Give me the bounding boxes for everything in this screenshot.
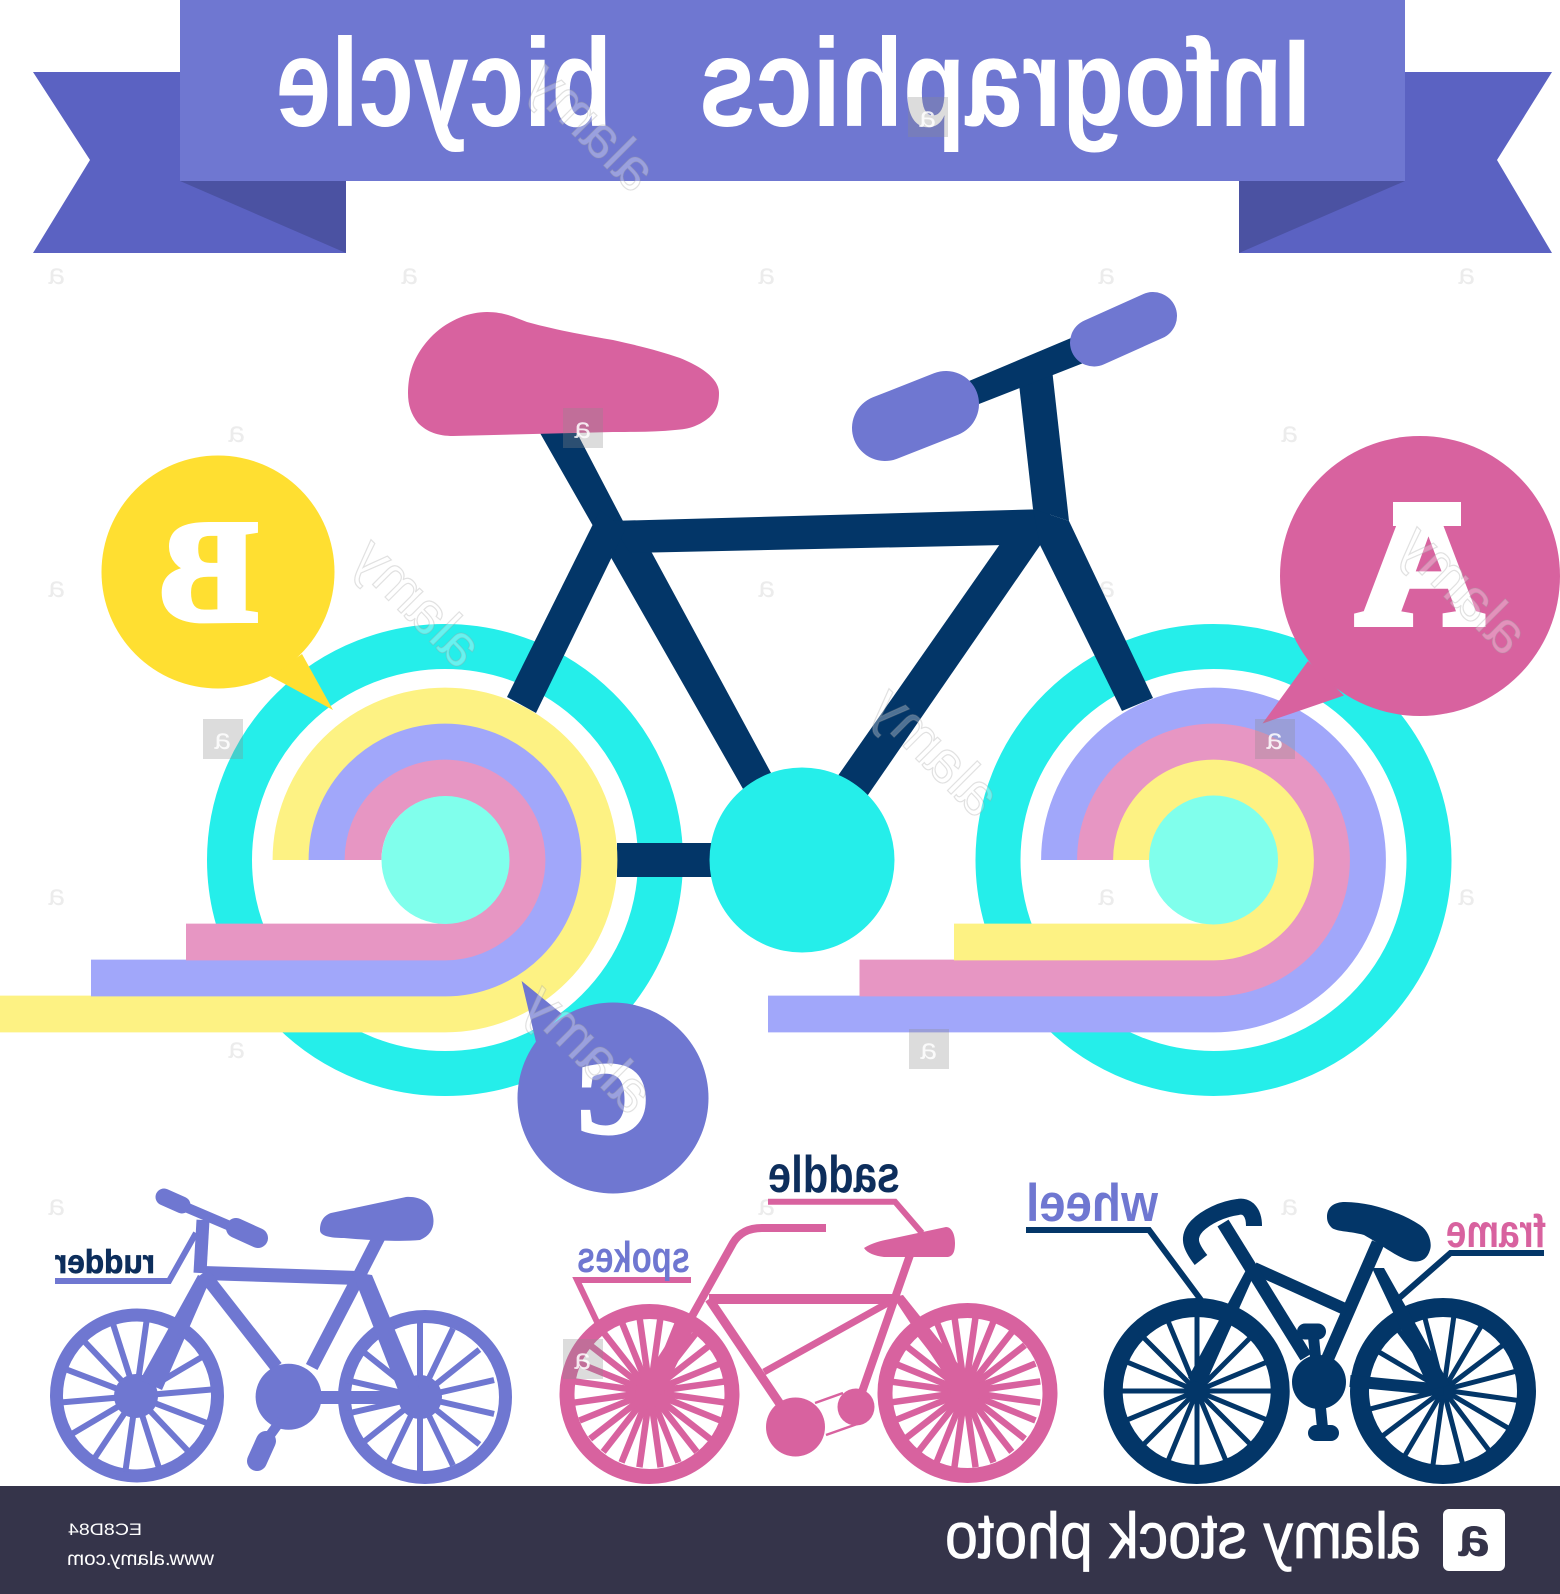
watermark: small tiles: a <box>48 1189 65 1222</box>
small bike: pink <box>567 1146 1050 1476</box>
watermark: small tiles: a <box>228 101 245 134</box>
frame <box>1223 1223 1444 1433</box>
watermark: small tiles: a <box>401 258 418 291</box>
watermark: small tiles: a <box>48 571 65 604</box>
watermark: small tiles: a <box>1098 571 1115 604</box>
frame leader line <box>1397 1253 1544 1300</box>
wheel leader line <box>1026 1230 1201 1300</box>
saddle leader line <box>768 1202 922 1233</box>
right wheel <box>885 1310 1050 1476</box>
watermark: alamy tiles: alamy <box>1386 512 1541 667</box>
watermark: small tiles: a <box>1281 1189 1298 1222</box>
label: saddle: saddle <box>768 1146 900 1204</box>
footer image id: EC8D84 <box>68 1520 142 1539</box>
pedal <box>257 1420 281 1461</box>
footer logo: a <box>1458 1505 1490 1568</box>
right wheel <box>1358 1304 1529 1476</box>
callout C: C <box>576 1043 648 1154</box>
forks <box>140 1272 420 1395</box>
ribbon right tail <box>1239 72 1552 253</box>
handlebar grip right <box>1094 316 1153 342</box>
label: wheel: wheel <box>1026 1174 1159 1233</box>
watermark: small tiles: a <box>228 416 245 449</box>
crank circle <box>710 768 894 952</box>
watermark: alamy tiles: alamy <box>514 49 669 204</box>
right wheel bands <box>768 706 1367 1014</box>
small bike: navy <box>1026 1174 1546 1476</box>
watermark: alamy tiles: alamy <box>511 971 666 1126</box>
watermark: alamy tiles: a <box>920 1033 937 1066</box>
watermark: small tiles: a <box>1458 879 1475 912</box>
left wheel bands <box>0 706 599 1014</box>
grips <box>164 1197 182 1205</box>
front-right wheel <box>344 1316 506 1478</box>
crank <box>256 1364 322 1430</box>
callout B: B <box>161 492 257 652</box>
watermark: alamy tiles: a <box>574 412 591 445</box>
crank <box>1292 1355 1346 1409</box>
crank <box>766 1398 825 1456</box>
callout A <box>1262 436 1560 724</box>
footer brand: alamy stock photo <box>945 1499 1421 1572</box>
small bike: periwinkle <box>52 1197 505 1482</box>
watermark: small tiles <box>48 101 1475 1222</box>
watermark: alamy tiles <box>203 49 1541 1379</box>
forks <box>1188 1268 1450 1390</box>
ribbon left fold <box>180 181 346 253</box>
left wheel ring <box>230 646 660 1074</box>
label: rudder: rudder <box>55 1243 155 1280</box>
watermark: small tiles: a <box>48 879 65 912</box>
right wheel hub <box>1149 796 1278 924</box>
watermark: alamy tiles: alamy <box>858 674 1013 829</box>
left wheel <box>567 1312 732 1476</box>
handlebar grip left <box>885 404 946 428</box>
handlebar <box>1191 1207 1254 1260</box>
left wheel <box>1113 1308 1280 1474</box>
sprocket <box>838 1388 874 1426</box>
ribbon left tail <box>33 72 346 253</box>
saddle <box>408 312 719 436</box>
callout B <box>102 456 334 710</box>
callout A: A <box>1357 467 1483 661</box>
watermark: alamy tiles: a <box>574 1343 591 1376</box>
watermark: small tiles: a <box>1098 879 1115 912</box>
title: Infographics: Infographics <box>699 14 1311 153</box>
watermark: alamy tiles: alamy <box>340 525 495 680</box>
ribbon main band <box>180 0 1405 181</box>
forks <box>640 1295 975 1395</box>
main bicycle <box>0 312 1429 1074</box>
footer logo <box>1443 1505 1505 1571</box>
left wheel hub <box>382 796 510 924</box>
right wheel ring <box>998 646 1429 1074</box>
saddle <box>864 1227 955 1257</box>
rudder leader line <box>55 1233 196 1281</box>
spokes leader line <box>577 1280 691 1322</box>
callout C <box>518 981 708 1194</box>
pedal top <box>1305 1324 1318 1340</box>
label: spokes: spokes <box>577 1233 690 1282</box>
watermark: small tiles: a <box>758 879 775 912</box>
watermark: small tiles: a <box>1281 416 1298 449</box>
watermark: small tiles: a <box>758 258 775 291</box>
watermark: small tiles: a <box>48 258 65 291</box>
watermark: small tiles: a <box>758 1189 775 1222</box>
watermark: alamy tiles: a <box>1266 723 1283 756</box>
watermark: small tiles: a <box>758 571 775 604</box>
watermark: small tiles: a <box>926 416 943 449</box>
title: bicycle: bicycle <box>276 14 612 153</box>
frame <box>162 1197 415 1398</box>
footer bar <box>0 1486 1560 1594</box>
watermark: alamy tiles: a <box>919 101 936 134</box>
watermark: small tiles: a <box>1098 258 1115 291</box>
watermark: small tiles: a <box>228 1032 245 1065</box>
frame <box>691 1228 910 1435</box>
label: frame: frame <box>1446 1205 1546 1257</box>
saddle <box>1327 1202 1431 1262</box>
watermark: small tiles: a <box>1458 258 1475 291</box>
pedal bottom <box>1316 1425 1331 1441</box>
ribbon right fold <box>1239 181 1405 253</box>
watermark: alamy tiles: a <box>214 723 231 756</box>
frame <box>507 338 1153 877</box>
title ribbon <box>33 0 1552 253</box>
footer url: www.alamy.com <box>67 1549 215 1570</box>
rear-left wheel <box>52 1310 220 1482</box>
saddle <box>320 1197 434 1241</box>
